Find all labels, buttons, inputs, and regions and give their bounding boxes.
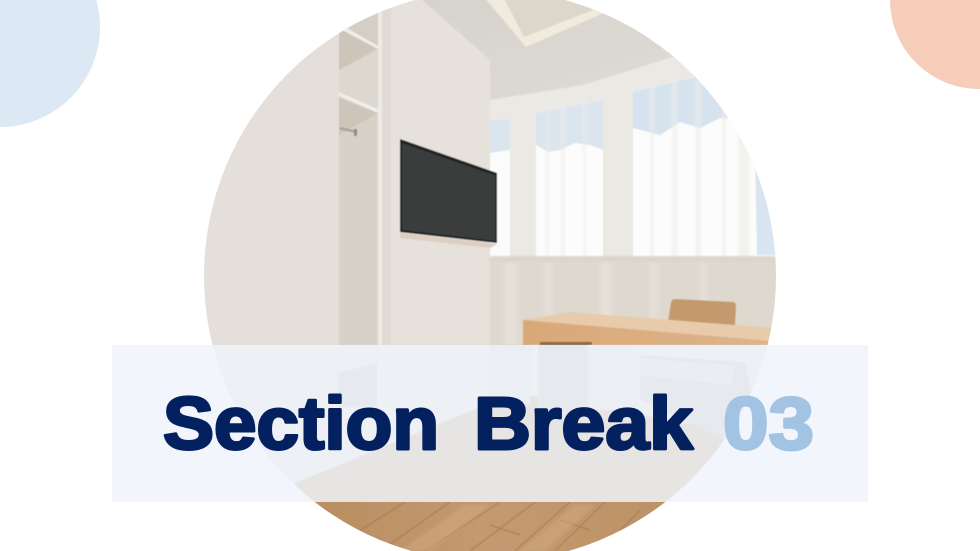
translucent title panel <box>112 345 868 502</box>
ceiling <box>422 0 662 99</box>
closet shelves <box>339 0 378 350</box>
television <box>400 139 497 248</box>
wooden floor <box>318 502 662 551</box>
lower room behind panel <box>295 344 768 503</box>
curtains and windows <box>490 57 780 265</box>
title: Section Break 03 <box>163 382 814 465</box>
lower wall below windows <box>490 256 780 353</box>
title: Section Break 03: Section <box>163 382 439 465</box>
decorative circle: top right <box>890 0 980 89</box>
decorative circle: top left <box>0 0 100 127</box>
wall and pillar <box>378 12 382 344</box>
photo: hotel room in circle <box>200 0 780 551</box>
chair <box>668 299 736 325</box>
title: Section Break 03: 03 <box>723 382 814 465</box>
title: Section Break 03: Break <box>474 382 694 465</box>
desk <box>522 312 771 345</box>
